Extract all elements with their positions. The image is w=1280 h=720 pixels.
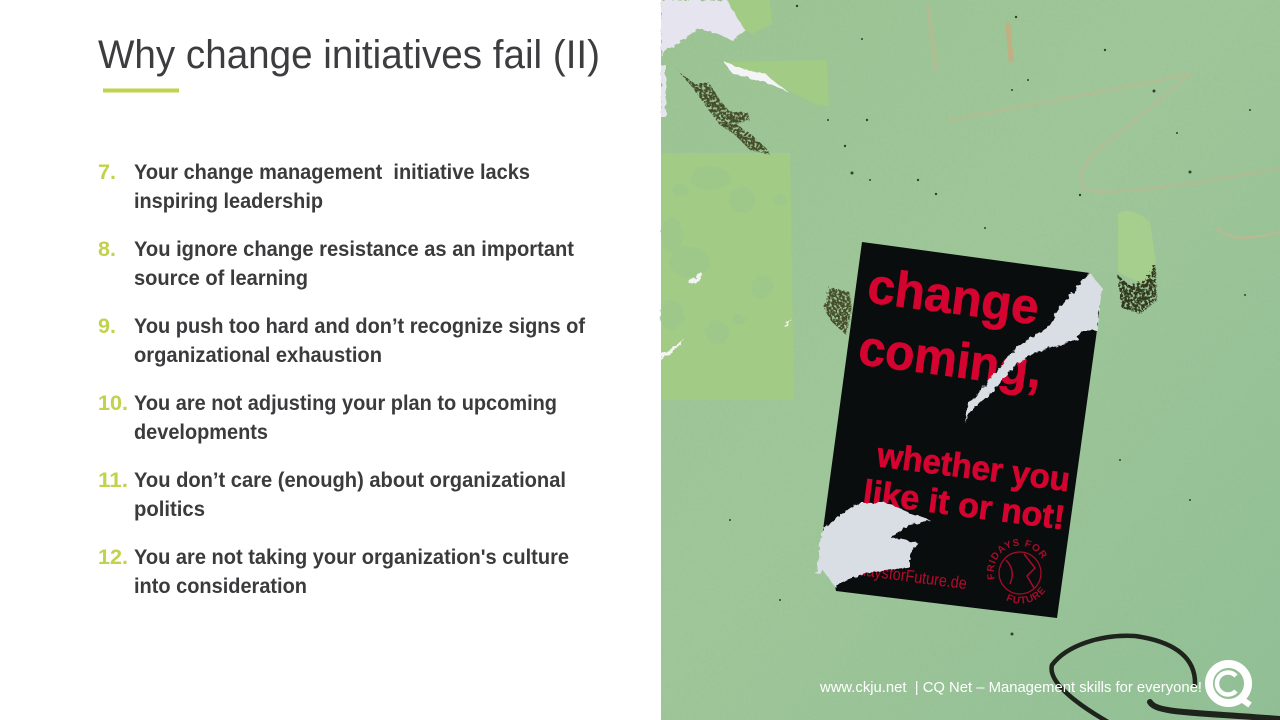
item 8 bbox=[98, 238, 574, 290]
poster slogan: coming, bbox=[856, 319, 1045, 399]
poster slogan: change bbox=[865, 257, 1042, 335]
item 7: Your change management initiative lacks bbox=[134, 161, 530, 184]
numbered list of reasons bbox=[98, 161, 586, 598]
item 9: organizational exhaustion bbox=[134, 344, 382, 367]
item 7: inspiring leadership bbox=[134, 190, 323, 213]
item 7: 7. bbox=[98, 161, 116, 184]
item 12: You are not taking your organization's culture bbox=[134, 546, 569, 569]
item 11: 11. bbox=[98, 469, 128, 492]
item 9: 9. bbox=[98, 315, 116, 338]
title: Why change initiatives fail (II) bbox=[98, 33, 600, 77]
item 10: 10. bbox=[98, 392, 128, 415]
item 8: You ignore change resistance as an important bbox=[134, 238, 574, 261]
wall grain texture bbox=[661, 0, 1280, 720]
Fridays for Future badge: FUTURE bbox=[1006, 586, 1046, 604]
item 12: 12. bbox=[98, 546, 128, 569]
footer tagline: www.ckju.net | CQ Net – Management skills for everyone! bbox=[819, 680, 1202, 696]
poster slogan: like it or not! bbox=[861, 473, 1067, 537]
item 8: source of learning bbox=[134, 267, 308, 290]
photo: green wall with poster bbox=[659, 0, 1280, 720]
torn paper strips bbox=[816, 273, 1102, 587]
item 9: You push too hard and don’t recognize signs of bbox=[134, 315, 586, 338]
icon: CQ logo bbox=[1209, 664, 1250, 705]
item 10 bbox=[98, 392, 557, 444]
item 11 bbox=[98, 469, 566, 521]
item 11: You don’t care (enough) about organizational bbox=[134, 469, 566, 492]
item 12: into consideration bbox=[134, 575, 307, 598]
dark scraped marks bbox=[680, 73, 1157, 335]
orange scribbles bbox=[928, 5, 1280, 238]
Fridays for Future badge bbox=[986, 539, 1047, 604]
specks bbox=[729, 5, 1251, 636]
Fridays for Future badge: FRIDAYS FOR bbox=[986, 539, 1047, 580]
black marker scrawl bbox=[1052, 636, 1280, 720]
poster slogan bbox=[856, 257, 1072, 593]
title accent underline bbox=[103, 88, 179, 92]
tape patches bbox=[661, 0, 1156, 400]
item 10: developments bbox=[134, 421, 268, 444]
torn white paint, top left bbox=[661, 0, 791, 360]
poster bbox=[814, 242, 1103, 618]
item 12 bbox=[98, 546, 569, 598]
wall background bbox=[661, 0, 1280, 720]
item 7 bbox=[98, 161, 530, 213]
poster sheet bbox=[823, 242, 1100, 618]
item 9 bbox=[98, 315, 586, 367]
item 8: 8. bbox=[98, 238, 116, 261]
item 11: politics bbox=[134, 498, 205, 521]
poster slogan: whether you bbox=[874, 436, 1072, 499]
faded spots on the tape bbox=[660, 166, 786, 344]
item 10: You are not adjusting your plan to upcoming bbox=[134, 392, 557, 415]
poster slogan: daysforFuture.de bbox=[857, 560, 968, 593]
